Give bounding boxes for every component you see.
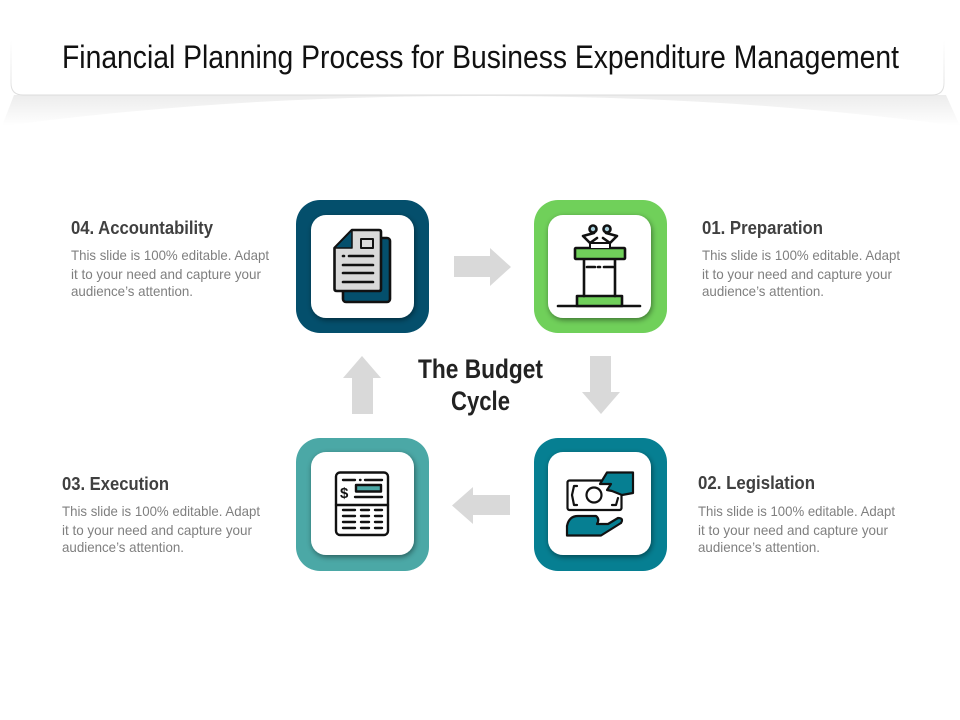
text block: 02 Legislation: audience’s attention. [698, 539, 820, 555]
arrow: execution to accountability [343, 356, 381, 414]
text block: 04 Accountability: it to your need and capture your [71, 266, 261, 282]
tile: execution [296, 438, 429, 571]
text block: 03 Execution: 03. Execution [62, 474, 169, 494]
text block: 04 Accountability: 04. Accountability [71, 218, 213, 238]
text block: 02 Legislation: 02. Legislation [698, 473, 815, 493]
text block: 03 Execution: This slide is 100% editable. Adapt [62, 503, 260, 519]
tile: accountability [296, 200, 429, 333]
text block: 01 Preparation: 01. Preparation [702, 218, 823, 238]
arrow: legislation to execution [452, 487, 510, 524]
tile: preparation [534, 200, 667, 333]
center label: The Budget Cycle: The Budget [418, 354, 543, 384]
icon: documents [334, 230, 390, 302]
icon: invoice table [336, 472, 388, 535]
tile: execution: $ [340, 485, 349, 502]
center label: The Budget Cycle [418, 354, 543, 416]
icon: podium [558, 226, 640, 306]
text block: 01 Preparation: it to your need and capture your [702, 266, 892, 282]
text block: 03 Execution: it to your need and capture your [62, 522, 252, 538]
text block: 04 Accountability [71, 218, 269, 299]
center label: The Budget Cycle: Cycle [451, 386, 510, 416]
tile: legislation [534, 438, 667, 571]
arrow: accountability to preparation [454, 248, 511, 286]
header banner [2, 40, 960, 126]
text block: 02 Legislation: This slide is 100% editable. Adapt [698, 503, 895, 519]
text block: 01 Preparation: audience’s attention. [702, 283, 824, 299]
icon: money and hands [567, 472, 633, 536]
text block: 01 Preparation: This slide is 100% editable. Adapt [702, 247, 900, 263]
text block: 01 Preparation [702, 218, 900, 299]
text block: 02 Legislation: it to your need and capture your [698, 522, 888, 538]
arrow: preparation to legislation [582, 356, 620, 414]
text block: 04 Accountability: audience’s attention. [71, 283, 193, 299]
text block: 04 Accountability: This slide is 100% editable. Adapt [71, 247, 269, 263]
text block: 03 Execution [62, 474, 260, 555]
text block: 02 Legislation [698, 473, 895, 555]
text block: 03 Execution: audience’s attention. [62, 539, 184, 555]
